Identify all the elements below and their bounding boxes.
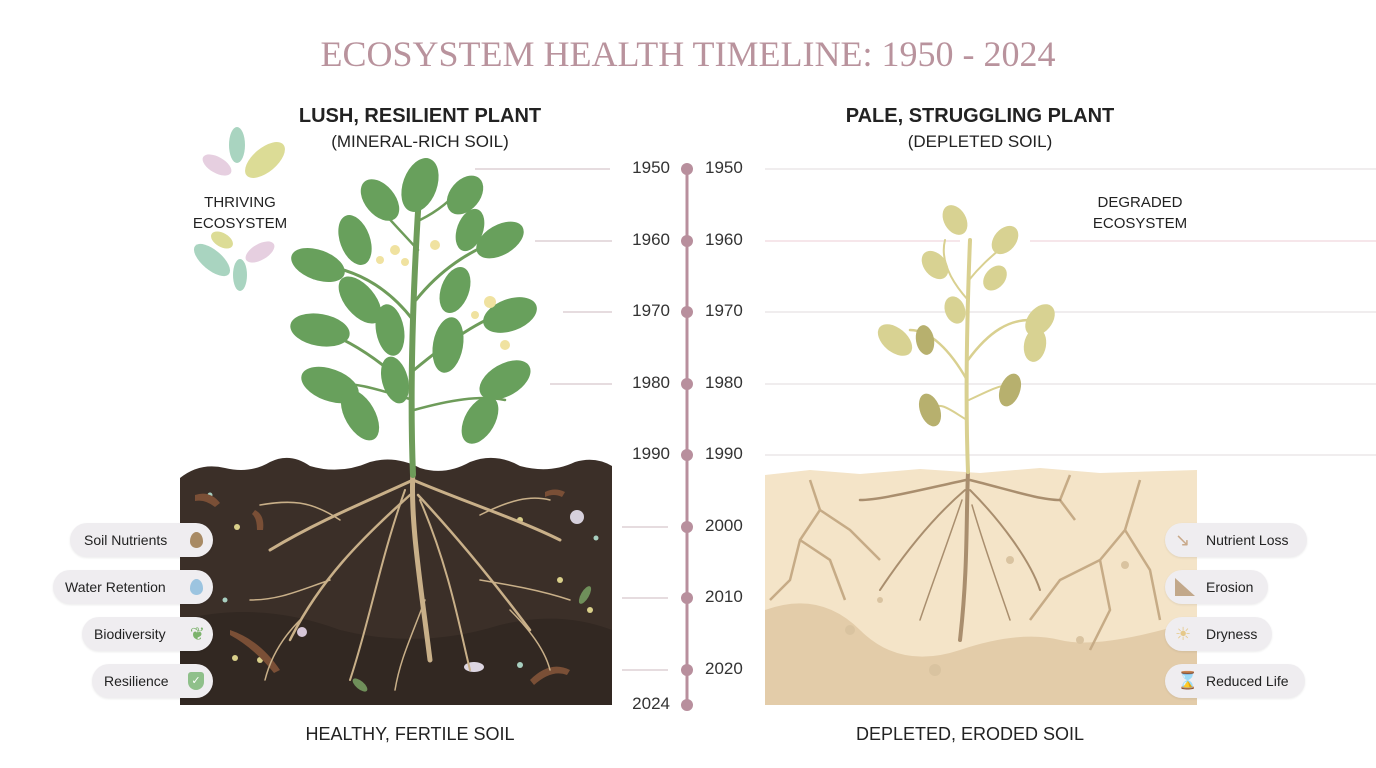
years right: 1990	[705, 444, 743, 463]
pills right	[1165, 523, 1307, 699]
heading right	[846, 105, 1114, 151]
timeline	[681, 163, 693, 711]
years left: 1960	[632, 230, 670, 249]
pill water retention	[53, 570, 213, 604]
leader lines	[475, 169, 1376, 670]
healthy soil	[180, 458, 612, 705]
years right: 2020	[705, 659, 743, 678]
bottom label right: DEPLETED, ERODED SOIL	[856, 724, 1084, 744]
label thriving	[193, 194, 287, 232]
label thriving: THRIVING	[204, 194, 276, 211]
title: ECOSYSTEM HEALTH TIMELINE: 1950 - 2024	[320, 34, 1055, 74]
label degraded	[1093, 194, 1187, 232]
pill dryness	[1165, 617, 1272, 651]
years right: 2010	[705, 587, 743, 606]
heading left: LUSH, RESILIENT PLANT	[299, 105, 541, 127]
years left: 1970	[632, 301, 670, 320]
bottom label left: HEALTHY, FERTILE SOIL	[305, 724, 515, 744]
healthy roots	[250, 470, 570, 690]
leaf cluster bottom	[189, 228, 278, 291]
years left: 2024	[632, 694, 670, 713]
pill dryness: ☀	[1175, 624, 1191, 644]
years right	[705, 158, 743, 678]
pill erosion	[1165, 570, 1268, 604]
pale plant	[872, 201, 1061, 472]
depleted soil	[765, 468, 1197, 705]
pill nutrient loss: Nutrient Loss	[1206, 532, 1288, 548]
label thriving: ECOSYSTEM	[193, 215, 287, 232]
pill reduced life: Reduced Life	[1206, 673, 1289, 689]
years right: 1970	[705, 301, 743, 320]
pill erosion: Erosion	[1206, 579, 1253, 595]
years right: 1980	[705, 373, 743, 392]
years left	[632, 158, 670, 713]
pill nutrient loss: ↘	[1175, 530, 1190, 550]
years right: 2000	[705, 516, 743, 535]
pills left	[53, 523, 213, 699]
years right: 1960	[705, 230, 743, 249]
years right: 1950	[705, 158, 743, 177]
heading left: (MINERAL-RICH SOIL)	[331, 132, 509, 151]
pill biodiversity	[82, 617, 213, 651]
pill biodiversity: Biodiversity	[94, 626, 166, 642]
years left: 1980	[632, 373, 670, 392]
heading left	[299, 105, 541, 151]
pill reduced life: ⌛	[1177, 671, 1198, 690]
pill water retention: Water Retention	[65, 579, 166, 595]
pill dryness: Dryness	[1206, 626, 1257, 642]
leaf cluster top	[199, 127, 291, 185]
pill soil nutrients: Soil Nutrients	[84, 532, 167, 548]
heading right: PALE, STRUGGLING PLANT	[846, 105, 1114, 127]
years left: 1990	[632, 444, 670, 463]
heading right: (DEPLETED SOIL)	[908, 132, 1052, 151]
pill resilience: Resilience	[104, 673, 169, 689]
years left: 1950	[632, 158, 670, 177]
depleted roots	[860, 472, 1060, 640]
pill biodiversity: ❦	[190, 624, 205, 644]
label degraded: DEGRADED	[1097, 194, 1182, 211]
pill nutrient loss	[1165, 523, 1307, 557]
pill reduced life	[1165, 664, 1305, 698]
healthy plant	[287, 153, 542, 475]
pill soil nutrients	[70, 523, 213, 557]
label degraded: ECOSYSTEM	[1093, 215, 1187, 232]
pill resilience	[92, 664, 213, 698]
pill resilience: ✓	[191, 675, 201, 687]
